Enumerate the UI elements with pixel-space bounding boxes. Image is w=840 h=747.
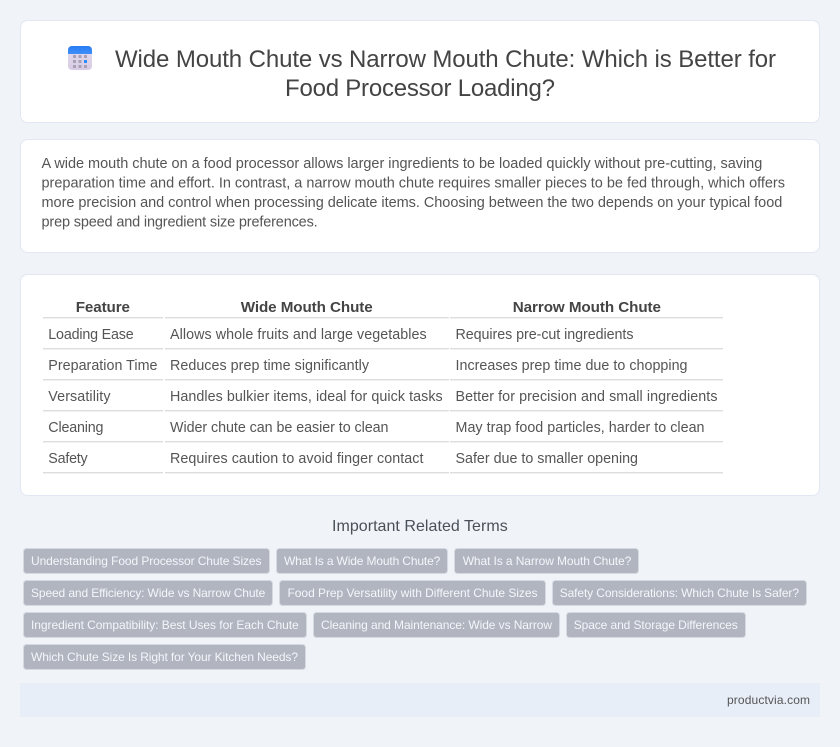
row: preparation time [48,358,688,374]
chip [24,612,306,638]
table header [76,299,661,316]
row: preparation time: Reduces prep time significantly [170,358,370,374]
summary text: prep speed and ingredient size preferences. [42,214,318,230]
table header: Narrow Mouth Chute [513,299,661,316]
row: versatility: Versatility [48,389,111,405]
chip: Food Prep Versatility with Different Chute Sizes [288,586,538,600]
chip [454,548,638,574]
chip: Safety Considerations: Which Chute Is Safer? [560,586,799,600]
heading: related terms: Important Related Terms [332,518,508,535]
row: safety: Safety [48,451,89,467]
chip: What Is a Narrow Mouth Chute? [463,554,632,568]
title [115,46,776,102]
row: cleaning: Wider chute can be easier to clean [170,420,389,436]
row: cleaning: Cleaning [48,420,104,436]
row: loading ease: Allows whole fruits and large vegetables [170,327,427,343]
row: loading ease: Loading Ease [48,327,134,343]
chip: Speed and Efficiency: Wide vs Narrow Chute [31,586,266,600]
row: versatility [48,389,718,405]
row: loading ease [48,327,634,343]
row: safety: Requires caution to avoid finger contact [170,451,424,467]
chip: What Is a Wide Mouth Chute? [284,554,441,568]
chip [24,580,272,606]
row: safety [48,451,638,467]
icon: calendar [68,46,92,70]
chip: Understanding Food Processor Chute Sizes [31,554,262,568]
summary text: A wide mouth chute on a food processor allows larger ingredients to be loaded quickly without pre-cutting, saving [42,156,762,172]
row: versatility: Handles bulkier items, ideal for quick tasks [170,389,443,405]
chip [24,548,270,574]
chip [566,612,746,638]
panel: header [20,20,820,122]
chip [276,548,448,574]
row: preparation time: Increases prep time due to chopping [456,358,688,374]
row: cleaning [48,420,705,436]
row: preparation time: Preparation Time [48,358,158,374]
row: safety: Safer due to smaller opening [456,451,638,467]
row: cleaning: May trap food particles, harder to clean [456,420,705,436]
row: loading ease: Requires pre-cut ingredients [456,327,634,343]
chip [280,580,546,606]
chip: Cleaning and Maintenance: Wide vs Narrow [321,618,552,632]
title: Wide Mouth Chute vs Narrow Mouth Chute: Which is Better for [115,46,776,73]
chip: Space and Storage Differences [574,618,738,632]
summary text: preparation time and effort. In contrast, a narrow mouth chute requires smaller pieces to be fed through, which offers [42,176,785,192]
summary text: more precision and control when processing delicate items. Choosing between the two depends on your typical food [42,195,782,211]
chip [314,612,560,638]
chip: Which Chute Size Is Right for Your Kitchen Needs? [31,650,298,664]
panel: comparison table [20,274,820,496]
footer [20,683,820,717]
footer: productvia.com [727,693,810,707]
table header: Wide Mouth Chute [241,299,373,316]
chip [552,580,806,606]
panel: summary [20,140,820,252]
summary text [42,156,785,230]
row: versatility: Better for precision and small ingredients [456,389,718,405]
chip: Ingredient Compatibility: Best Uses for Each Chute [31,618,299,632]
title: Food Processor Loading? [285,75,555,102]
table header: Feature [76,299,130,316]
related terms chips [24,548,806,670]
chip [24,644,306,670]
